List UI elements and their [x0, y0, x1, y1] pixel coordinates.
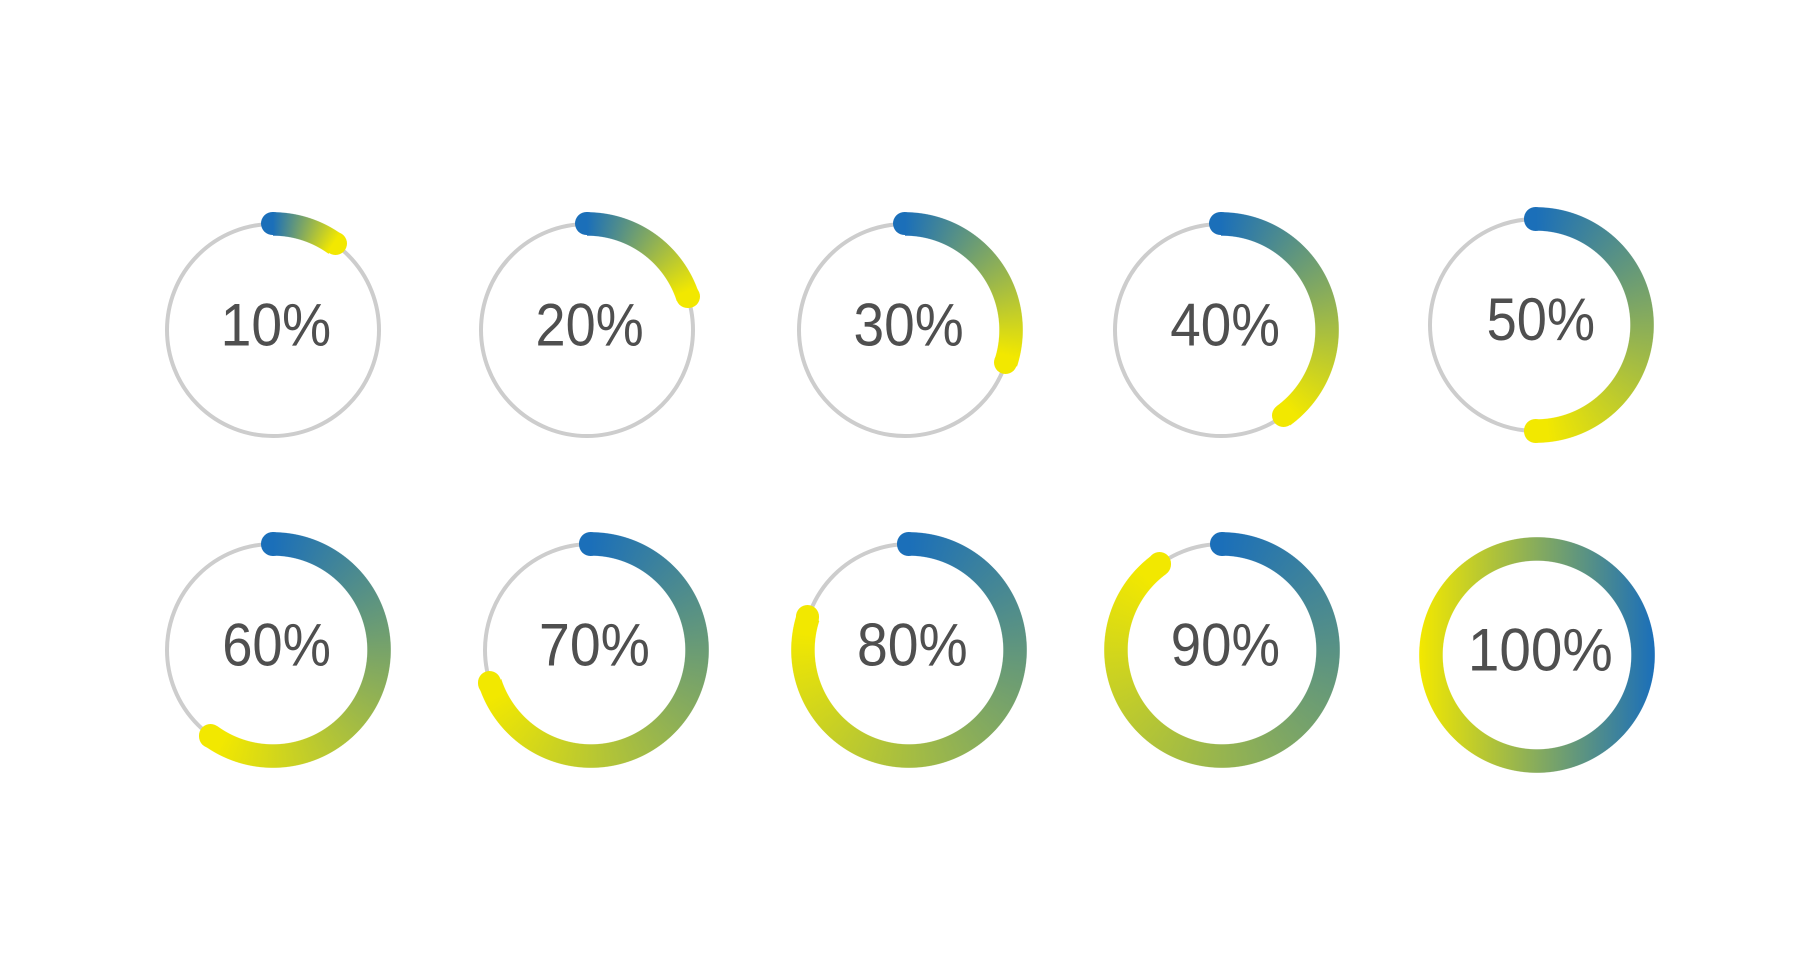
- progress arc: [204, 532, 391, 768]
- start cap: [893, 212, 916, 235]
- progress arc: [1102, 530, 1342, 770]
- label: 50%: 50%: [1486, 286, 1595, 353]
- label: 40%: 40%: [1170, 291, 1280, 358]
- track ring: [1428, 217, 1644, 433]
- progress arc: [788, 530, 1028, 770]
- label: 90%: 90%: [1171, 612, 1280, 679]
- label: 100%: 100%: [1467, 617, 1612, 684]
- start cap: [1209, 212, 1233, 235]
- progress arc: [1536, 207, 1654, 443]
- gauge: 20%: [479, 212, 700, 438]
- track ring: [1113, 222, 1329, 438]
- track ring: [796, 222, 1012, 438]
- track ring: [165, 542, 381, 758]
- start cap: [575, 212, 599, 235]
- track ring: [800, 542, 1016, 758]
- label: 30%: 30%: [853, 291, 963, 358]
- label: 70%: 70%: [538, 612, 649, 679]
- end cap: [199, 724, 222, 748]
- start cap: [261, 532, 285, 556]
- end cap: [676, 285, 700, 308]
- track ring: [165, 222, 381, 438]
- gauge: 80%: [791, 532, 1027, 768]
- label: 20%: 20%: [536, 291, 644, 358]
- progress arc: [470, 530, 710, 770]
- end cap: [1148, 552, 1171, 576]
- start cap: [261, 212, 285, 235]
- end cap: [1524, 419, 1547, 443]
- end cap: [1272, 404, 1295, 427]
- end cap: [994, 350, 1017, 374]
- track ring: [479, 222, 695, 438]
- end cap: [796, 605, 819, 629]
- progress arc: [587, 212, 698, 301]
- track ring: [482, 542, 698, 758]
- label: 80%: 80%: [856, 612, 967, 679]
- start cap: [579, 532, 602, 556]
- gauge: 100%: [1419, 537, 1655, 773]
- end cap: [324, 232, 347, 255]
- gauge: 90%: [1104, 532, 1340, 768]
- gauge: 50%: [1428, 207, 1654, 443]
- start cap: [1524, 207, 1547, 231]
- gauge: 30%: [797, 212, 1023, 438]
- gauge: 10%: [165, 212, 381, 438]
- progress arc: [1221, 212, 1339, 426]
- gauge: 40%: [1113, 212, 1339, 438]
- progress arc: [905, 212, 1023, 366]
- label: 60%: 60%: [222, 612, 331, 679]
- track ring: [1114, 542, 1330, 758]
- gauge: 70%: [478, 532, 709, 768]
- start cap: [897, 532, 920, 556]
- progress arc: [273, 212, 342, 254]
- label: 10%: 10%: [221, 291, 331, 358]
- end cap: [478, 671, 501, 695]
- gauge: 60%: [165, 532, 391, 768]
- progress ring: [1416, 535, 1656, 775]
- start cap: [1210, 532, 1234, 556]
